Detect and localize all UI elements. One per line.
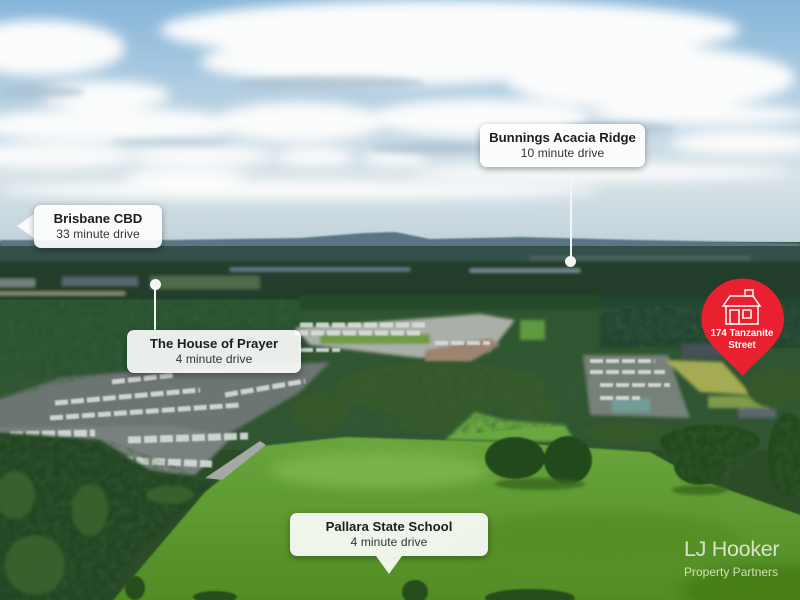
tree canopy texture <box>0 295 800 600</box>
text: property address: Street <box>728 340 756 351</box>
grass field <box>105 437 800 600</box>
callout: Bunnings Acacia Ridge: Bunnings Acacia Ridge <box>489 130 636 145</box>
marker: House of Prayer dot <box>150 279 161 290</box>
text: property address <box>711 328 774 351</box>
marker: Bunnings location dot <box>565 256 576 267</box>
callout: House of Prayer leader line <box>154 285 156 332</box>
forest midground <box>0 300 800 450</box>
callout: Brisbane CBD: 33 minute drive <box>56 227 140 241</box>
central trees <box>290 362 800 443</box>
icon: red location pin with house <box>701 278 784 376</box>
callout: Bunnings Acacia Ridge leader line <box>570 165 572 262</box>
callout: Pallara State School <box>290 513 488 556</box>
callout: Bunnings Acacia Ridge <box>480 124 645 167</box>
trees in the field <box>485 413 800 497</box>
callout: Bunnings Acacia Ridge: 10 minute drive <box>521 146 604 160</box>
callout: The House of Prayer <box>127 330 301 373</box>
callout: The House of Prayer: 4 minute drive <box>176 352 252 366</box>
callout: The House of Prayer: The House of Prayer <box>150 336 278 351</box>
arrow: Brisbane CBD pointer <box>17 214 34 238</box>
callout: Pallara State School: Pallara State School <box>326 519 452 534</box>
arrow: Pallara State School pointer <box>376 556 402 574</box>
callout: Pallara State School: 4 minute drive <box>351 535 427 549</box>
logo: LJ Hooker Property Partners: LJ Hooker <box>684 537 779 561</box>
callout: Brisbane CBD: Brisbane CBD <box>54 211 142 226</box>
text: property address: 174 Tanzanite <box>711 328 773 339</box>
house rows <box>10 325 670 464</box>
distant land <box>0 232 800 300</box>
logo: LJ Hooker Property Partners: Property Partners <box>684 565 778 579</box>
foreground trees left <box>0 432 212 600</box>
logo: LJ Hooker Property Partners <box>684 537 780 579</box>
callout: Brisbane CBD <box>34 205 162 248</box>
